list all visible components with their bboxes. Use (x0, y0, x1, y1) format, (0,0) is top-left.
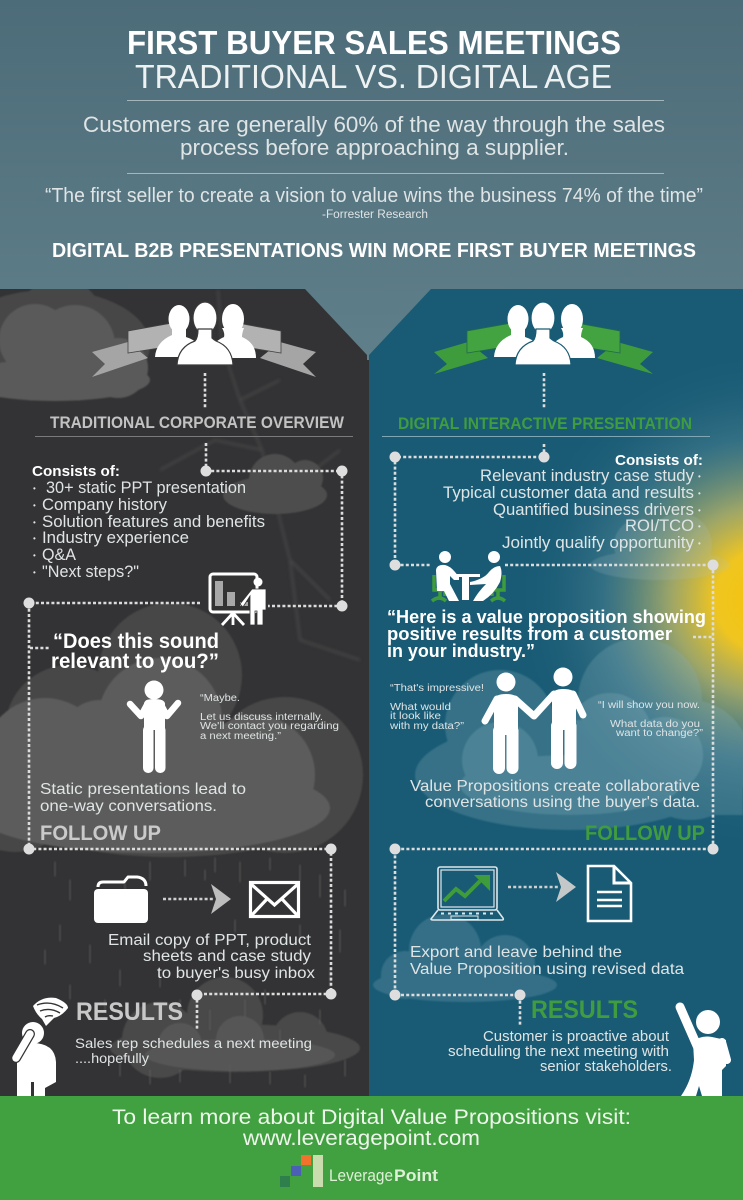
caption: impressive reply: with my data?” (389, 721, 464, 732)
logo: Leverage (329, 1166, 393, 1185)
text: static presentations: one-way conversations. (40, 798, 217, 815)
list: consists of digital: Typical customer data and results (443, 484, 694, 502)
quote: “The first seller to create a vision to value wins the business 74% of the time” (45, 185, 703, 207)
list: consists of digital (443, 452, 703, 552)
caption: maybe reply (200, 693, 339, 742)
icon: celebrating person (680, 1007, 727, 1096)
cloud: large front (0, 658, 330, 853)
icon: handshake (485, 668, 583, 774)
footer text: To learn more about Digital Value Propositions visit: (112, 1106, 631, 1129)
logo: Point (394, 1166, 438, 1185)
footer (0, 1096, 743, 1200)
quote: does this sound relevant: relevant to you?” (51, 650, 219, 673)
list: consists of: Company history (42, 496, 168, 514)
heading: results: RESULTS (76, 998, 183, 1026)
caption: impressive reply: “That's impressive! (390, 683, 484, 694)
icon: two people at table (432, 551, 505, 601)
cloud: top left (0, 289, 150, 363)
text: email copy: to buyer's busy inbox (157, 965, 315, 982)
subtitle: Customers are generally 60% of the way through the sales (83, 112, 665, 137)
caption: maybe reply: “Maybe. (200, 693, 240, 704)
title: TRADITIONAL VS. DIGITAL AGE (135, 58, 612, 95)
text: value propositions: conversations using the buyer's data. (425, 794, 700, 811)
heading: digital: DIGITAL INTERACTIVE PRESENTATION (398, 415, 692, 433)
connector: digital path (390, 373, 718, 1025)
list: consists of: • (33, 518, 36, 527)
caption: impressive reply: it look like (390, 711, 442, 722)
list: consists of: • (33, 501, 36, 510)
quote: value proposition (387, 607, 706, 661)
icon: document (588, 866, 631, 921)
icon: presenter with chart (210, 574, 266, 625)
cloud: large back (0, 603, 363, 857)
header background (0, 0, 743, 360)
caption: impressive reply (389, 683, 484, 732)
cloud: small (223, 454, 327, 514)
caption: show you now: “I will show you now. (598, 700, 700, 711)
heading: traditional: TRADITIONAL CORPORATE OVERVIEW (50, 414, 344, 432)
section heading: DIGITAL B2B PRESENTATIONS WIN MORE FIRST BUYER MEETINGS (52, 240, 696, 262)
title: FIRST BUYER SALES MEETINGS (127, 24, 621, 61)
list: consists of: • (33, 534, 36, 543)
text: customer proactive: Customer is proactive about (483, 1029, 669, 1045)
list: consists of digital: Quantified business drivers (493, 501, 694, 519)
header text block (45, 24, 703, 262)
heading: follow up digital: FOLLOW UP (585, 822, 705, 845)
text: email copy (108, 932, 315, 982)
text: sales rep: Sales rep schedules a next meeting (75, 1035, 312, 1051)
footer text: www.leveragepoint.com (242, 1127, 480, 1150)
cloud: behind consists list (590, 513, 730, 580)
list: consists of: Consists of: (32, 463, 120, 480)
text: customer proactive: senior stakeholders. (540, 1059, 672, 1075)
footer text (112, 1106, 631, 1150)
list: consists of: • (33, 551, 36, 560)
text: customer proactive (448, 1029, 672, 1075)
text: sales rep (75, 1035, 312, 1066)
list: consists of: • (33, 484, 36, 493)
logo (280, 1155, 438, 1187)
rain (45, 858, 345, 1087)
list: consists of: Solution features and benefits (42, 513, 265, 531)
list: consists of (32, 463, 265, 581)
text: export: Value Proposition using revised data (410, 961, 684, 978)
text: email copy: Email copy of PPT, product (108, 932, 312, 949)
caption: show you now: What data do you (610, 719, 700, 730)
caption: maybe reply: Let us discuss internally. (200, 712, 323, 723)
list: consists of: Q&A (42, 546, 76, 564)
text: value propositions (410, 778, 700, 811)
icon: envelope (250, 882, 298, 916)
list: consists of: 30+ static PPT presentation (46, 479, 246, 497)
subtitle: process before approaching a supplier. (180, 135, 569, 160)
list: consists of digital: ROI/TCO (625, 517, 694, 535)
icon: laptop with chart (431, 867, 503, 920)
text: export: Export and leave behind the (410, 944, 622, 961)
list: consists of digital: • (698, 472, 701, 481)
caption: show you now (598, 700, 703, 739)
quote: value proposition: “Here is a value proposition showing (387, 607, 706, 627)
heading: results digital: RESULTS (531, 996, 638, 1024)
text: sales rep: ....hopefully (75, 1050, 149, 1066)
quote: does this sound relevant: “Does this sound (53, 630, 219, 653)
caption: maybe reply: We'll contact you regarding (200, 721, 339, 732)
list: consists of digital: Relevant industry case study (480, 467, 695, 485)
quote (45, 185, 703, 221)
list: consists of: "Next steps?" (42, 563, 139, 581)
icon: tornado over worried person (16, 998, 68, 1096)
icon: green ribbon with three people (434, 302, 653, 374)
icon: shrugging person (130, 680, 178, 773)
cloud: bottom (110, 977, 360, 1078)
text: static presentations: Static presentations lead to (40, 781, 246, 798)
panel: digital (369, 289, 743, 1096)
text: email copy: sheets and case study (143, 948, 311, 965)
quote: value proposition: positive results from a customer (387, 624, 672, 644)
list: consists of digital: Consists of: (615, 452, 703, 469)
list: consists of: Industry experience (42, 529, 189, 547)
cloud: lower left (373, 914, 557, 1002)
list: consists of digital: • (698, 522, 701, 531)
connector: traditional path (24, 373, 348, 1030)
icon: grey ribbon with three people (92, 302, 316, 377)
lightning (160, 290, 360, 660)
icon: folder (94, 877, 148, 923)
heading: follow up: FOLLOW UP (40, 822, 161, 845)
title (127, 24, 621, 95)
caption: impressive reply: What would (390, 702, 451, 713)
arrow: folder to envelope (163, 884, 231, 914)
caption: show you now: want to change?” (615, 728, 703, 739)
quote: -Forrester Research (322, 209, 428, 221)
list: consists of digital: • (698, 539, 701, 548)
list: consists of digital: Jointly qualify opportunity (502, 534, 695, 552)
panel: traditional (0, 278, 367, 1096)
text: static presentations (40, 781, 246, 815)
cloud: right large (415, 638, 743, 830)
list: consists of digital: • (698, 489, 701, 498)
subtitle (83, 112, 665, 160)
quote: value proposition: in your industry.” (387, 641, 535, 661)
caption: maybe reply: a next meeting.” (200, 731, 281, 742)
list: consists of: • (33, 568, 36, 577)
arrow: laptop to document (508, 872, 576, 902)
quote: does this sound relevant (51, 630, 219, 673)
text: export (410, 944, 684, 978)
text: value propositions: Value Propositions create collaborative (410, 778, 700, 795)
list: consists of digital: • (698, 506, 701, 515)
text: customer proactive: scheduling the next meeting with (448, 1044, 669, 1060)
